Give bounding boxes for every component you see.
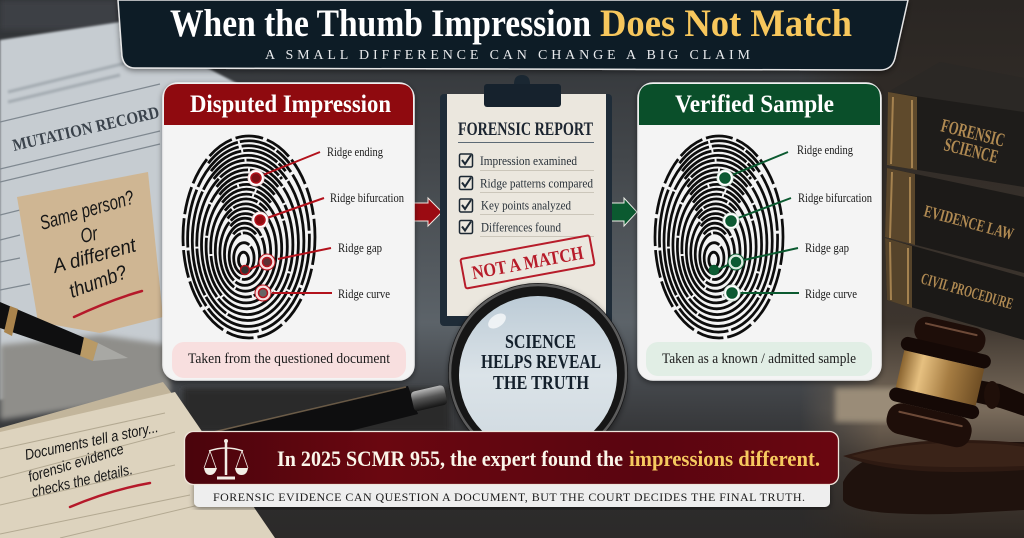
panel heading: Verified Sample [675,91,834,118]
lens text: SCIENCE [505,332,576,353]
checklist: Ridge patterns compared [480,176,594,190]
clipboard clip [484,75,561,107]
checklist: Differences found [481,220,562,234]
footnote strip: FORENSIC EVIDENCE CAN QUESTION A DOCUMENT, BUT THE COURT DECIDES THE FINAL TRUTH. [213,490,805,504]
gavel head [881,312,998,451]
case banner [184,432,838,484]
labels: verified: Ridge bifurcation [798,191,873,205]
banner text: impressions different. [629,446,820,471]
labels: disputed: Ridge bifurcation [330,191,405,205]
footnote strip [194,478,830,507]
labels: verified: Ridge gap [805,241,849,255]
lens text: THE TRUTH [493,373,589,394]
sticky note text: A different [50,234,140,278]
mutation record paper [0,22,240,420]
panel: disputed impression [163,83,414,380]
title: When the Thumb Impression [170,2,591,45]
sticky note [17,172,163,333]
sticky note text: Same person? [37,187,137,235]
labels: disputed: Ridge ending [327,145,384,159]
fingerprint [655,136,783,338]
checklist: Key points analyzed [481,198,572,212]
handwritten note [23,419,160,507]
labels: disputed [327,145,405,301]
gavel base [843,440,1024,514]
markers: disputed [240,152,332,301]
labels: verified: Ridge ending [797,143,854,157]
panel caption: Taken as a known / admitted sample [662,351,856,367]
panel: verified sample [638,83,881,380]
checklist [460,154,594,234]
document stack with note [0,382,275,538]
labels: verified [797,143,873,301]
title banner [118,0,908,70]
sticky note text: thumb? [66,261,131,303]
labels: disputed: Ridge gap [338,241,382,255]
sticky note text [37,187,142,317]
panel caption [172,342,406,378]
title: Does Not Match [600,2,852,45]
sticky note text: Or [78,223,101,248]
mutation record title: MUTATION RECORD [11,103,161,155]
gavel handle [974,380,1024,416]
markers: verified [710,152,799,301]
panel heading [639,84,880,125]
report heading: FORENSIC REPORT [458,120,593,140]
magnifier handle [200,385,448,436]
panel caption: Taken from the questioned document [188,351,390,367]
handwritten note: forensic evidence [26,441,126,486]
checklist: Impression examined [480,154,578,168]
fingerprint [183,136,315,338]
labels: verified: Ridge curve [805,287,857,301]
pen [0,302,128,361]
law books [885,62,1024,340]
stamp: not a match: NOT A MATCH [470,243,585,284]
subtitle: A SMALL DIFFERENCE CAN CHANGE A BIG CLAIM [265,48,751,63]
book titles [919,115,1016,313]
lens text [481,332,601,394]
panel heading: Disputed Impression [190,91,391,118]
arrow: green [606,198,637,226]
arrow: red [414,198,442,226]
labels: disputed: Ridge curve [338,287,390,301]
icon: scales of justice [204,440,248,478]
clipboard report [440,75,612,326]
lens text: HELPS REVEAL [481,352,601,373]
panel caption [646,342,872,376]
handwritten note: Documents tell a story... [23,419,160,464]
gavel [843,312,1024,514]
banner text: In 2025 SCMR 955, the expert found the [277,446,623,471]
panel heading [164,84,413,125]
magnifying glass [200,283,628,463]
handwritten note: checks the details. [30,461,134,501]
